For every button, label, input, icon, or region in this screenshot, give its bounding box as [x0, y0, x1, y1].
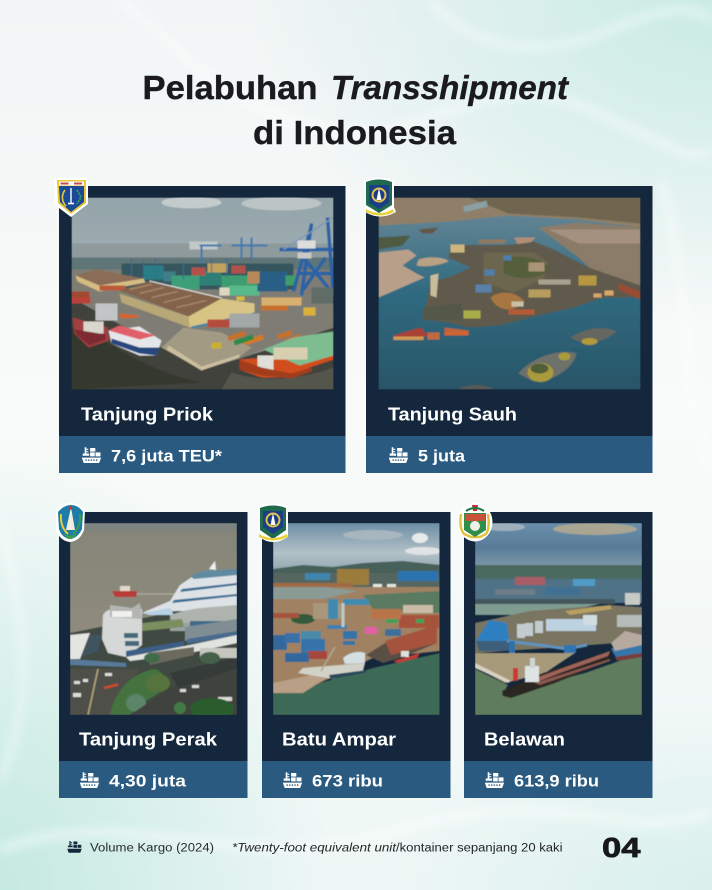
- main island: [422, 242, 640, 328]
- photo: Tanjung Perak terminal: [70, 523, 237, 715]
- barge: [240, 336, 334, 378]
- legend: cargo volume: [67, 841, 214, 854]
- card background: [59, 512, 248, 798]
- port name: Tanjung Sauh: [388, 404, 517, 425]
- panel: Belawan: [458, 502, 652, 798]
- emblem: DKI Jakarta: [54, 178, 88, 217]
- far warehouse: [76, 270, 144, 286]
- tugboat: [112, 591, 137, 597]
- cargo volume bar: 5 juta: [418, 448, 466, 466]
- water: [475, 653, 642, 715]
- trucks: [227, 330, 302, 345]
- photo: Batu Ampar port: [273, 523, 440, 715]
- panel: Tanjung Priok: [54, 178, 346, 473]
- cruise ship: [142, 571, 237, 613]
- panel: Tanjung Perak: [56, 503, 248, 798]
- land quay: [475, 653, 575, 683]
- boats: [298, 663, 365, 679]
- cargo volume bar: [59, 761, 248, 798]
- card background: [366, 186, 652, 473]
- footnote: [232, 842, 562, 854]
- legend: cargo volume: Volume Kargo (2024): [90, 842, 214, 854]
- photo: Tanjung Sauh aerial: [378, 198, 640, 390]
- icon: cargo ship: [485, 772, 504, 788]
- icon: cargo ship: [389, 447, 408, 463]
- panel: Batu Ampar: [258, 504, 450, 798]
- trees and parking: [110, 669, 165, 715]
- moored ships: [394, 328, 428, 340]
- cranes: [280, 218, 334, 296]
- title: di Indonesia: [253, 115, 456, 152]
- main warehouse: [120, 282, 222, 316]
- emblem: Jawa Timur: [56, 503, 85, 542]
- footnote: /kontainer sepanjang 20 kaki: [396, 842, 562, 854]
- emblem: Kota Batam: [258, 504, 288, 542]
- footnote: *Twenty-foot equivalent unit: [232, 842, 397, 854]
- cargo volume bar: 613,9 ribu: [514, 773, 599, 791]
- water: [273, 653, 440, 715]
- card background: [464, 512, 652, 798]
- title: Pelabuhan: [142, 70, 318, 107]
- port name: Batu Ampar: [282, 729, 396, 750]
- emblem: Sumatera Utara: [458, 502, 492, 542]
- title: Transshipment: [331, 70, 570, 107]
- cargo volume bar: 7,6 juta TEU*: [111, 448, 223, 466]
- card background: [59, 186, 346, 473]
- cargo volume bar: [366, 436, 652, 473]
- terminal building: [170, 607, 237, 631]
- port name: Tanjung Priok: [81, 404, 214, 425]
- silos: [517, 621, 543, 638]
- cargo volume bar: 673 ribu: [312, 773, 383, 791]
- left canopy: [70, 633, 90, 659]
- emblem: Kepulauan Riau: [364, 178, 396, 216]
- cargo volume bar: [262, 761, 450, 798]
- cargo volume bar: [59, 436, 346, 473]
- port name: Belawan: [484, 729, 565, 750]
- card background: [262, 512, 450, 798]
- photo: Tanjung Priok port: [72, 198, 334, 390]
- blue storage dome: [476, 620, 509, 645]
- icon: cargo ship legend: [67, 841, 82, 853]
- photo: Belawan port: [475, 523, 642, 715]
- icon: cargo ship: [82, 447, 101, 463]
- ships: [108, 326, 162, 356]
- port name: Tanjung Perak: [79, 729, 218, 750]
- islets: [518, 352, 576, 382]
- icon: cargo ship: [283, 772, 302, 788]
- cargo volume bar: 4,30 juta: [109, 773, 187, 791]
- icon: cargo ship: [80, 772, 99, 788]
- containers: [273, 635, 287, 650]
- panel: Tanjung Sauh: [364, 178, 652, 473]
- title: [142, 70, 570, 152]
- tanker at right: [611, 641, 642, 659]
- cargo volume bar: [464, 761, 652, 798]
- page number: 04: [602, 832, 641, 863]
- container stacks: [122, 264, 294, 290]
- bulk carrier: [502, 651, 610, 698]
